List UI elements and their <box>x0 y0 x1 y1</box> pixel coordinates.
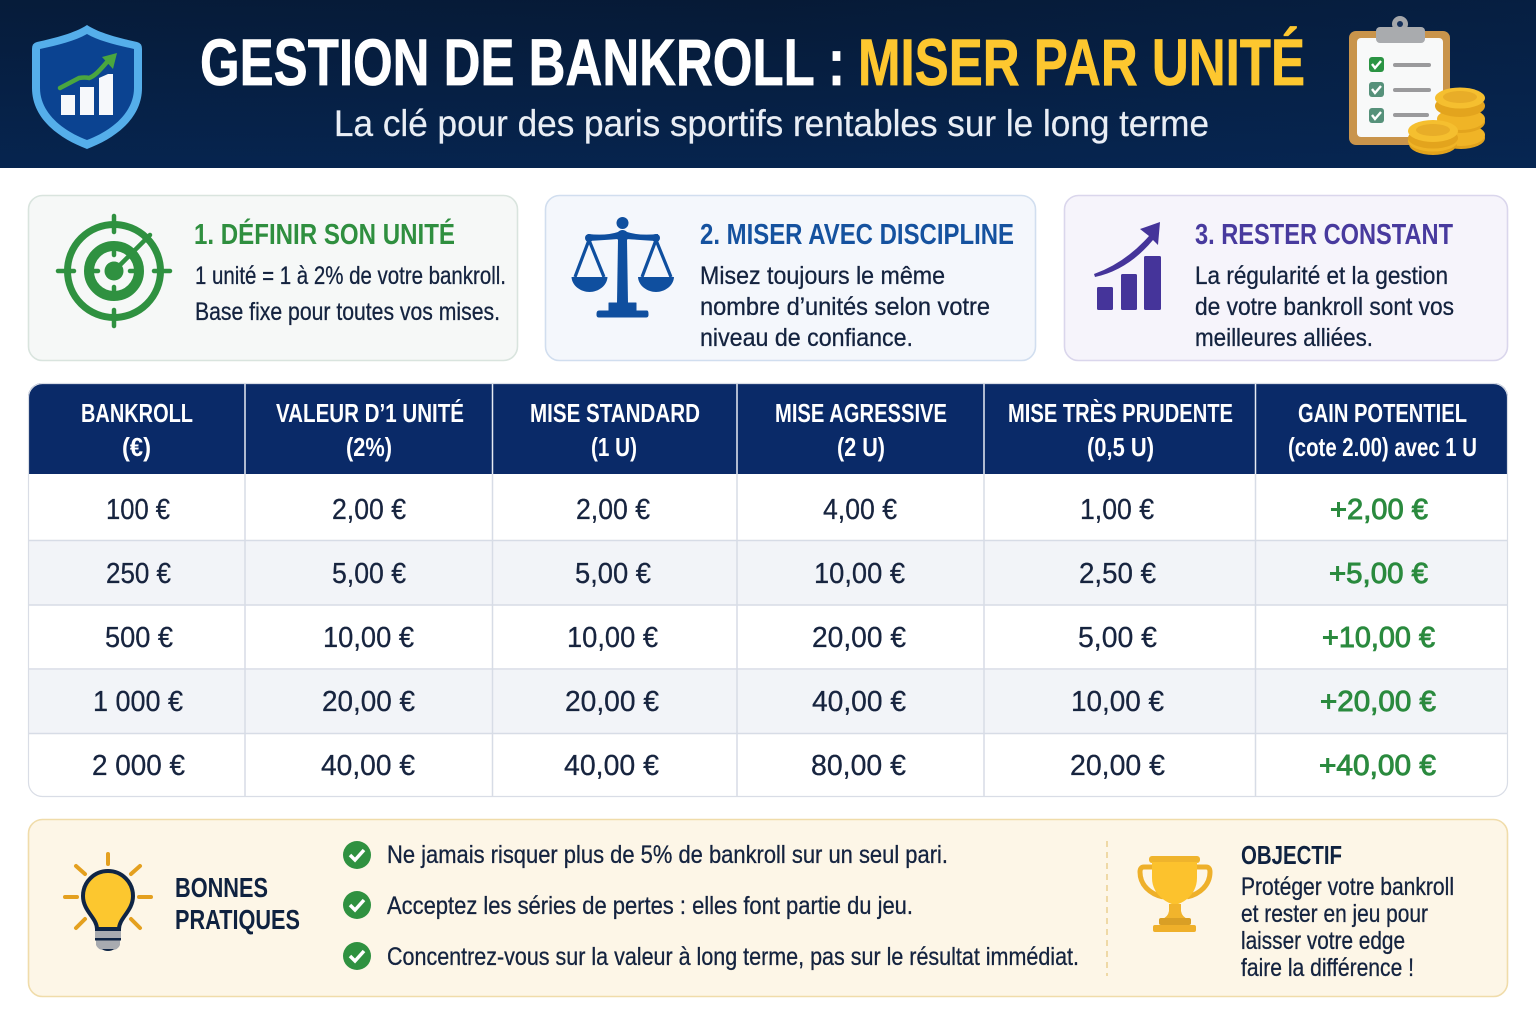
table row: 1 000 €: 20,00 € <box>565 686 659 718</box>
icon: rising chart <box>1094 222 1161 310</box>
table header row: (2 U) <box>837 432 885 462</box>
table row: 2 000 €: 80,00 € <box>811 750 906 782</box>
icon: shield with growth chart <box>32 25 142 149</box>
objective text <box>1241 840 1454 982</box>
text block: niveau de confiance. <box>700 324 913 352</box>
objective text: et rester en jeu pour <box>1241 900 1428 928</box>
heading: 3. RESTER CONSTANT <box>1195 219 1453 251</box>
table header row: (1 U) <box>591 432 637 462</box>
table row: 2 000 €: +40,00 € <box>1319 750 1436 782</box>
table row: 1 000 €: +20,00 € <box>1320 686 1436 718</box>
table row: 250 € <box>106 558 1428 590</box>
table row: 2 000 €: 2 000 € <box>92 750 185 782</box>
panel: définir son unité <box>28 196 518 360</box>
table row: 1 000 €: 10,00 € <box>1071 686 1164 718</box>
heading: BONNES <box>175 872 268 903</box>
objective text: faire la différence ! <box>1241 954 1414 982</box>
table header row: (cote 2.00) avec 1 U <box>1288 432 1477 462</box>
panel: miser avec discipline <box>546 196 1036 360</box>
text block: nombre d’unités selon votre <box>700 293 990 321</box>
table row: 250 €: 5,00 € <box>332 558 406 590</box>
table header row: (0,5 U) <box>1087 432 1154 462</box>
table header row: MISE AGRESSIVE <box>775 398 947 428</box>
table row: 500 €: 20,00 € <box>812 622 906 654</box>
table row: 250 €: +5,00 € <box>1329 558 1428 590</box>
title: GESTION DE BANKROLL : <box>200 25 845 99</box>
table row: 250 €: 5,00 € <box>575 558 651 590</box>
table header row: BANKROLL <box>81 398 193 428</box>
table row: 100 €: 2,00 € <box>332 494 406 526</box>
header banner <box>0 0 1536 168</box>
text block <box>1195 262 1454 352</box>
table row: 2 000 € <box>92 750 1436 782</box>
table row: 500 € <box>105 622 1435 654</box>
text block <box>195 262 506 326</box>
table row: 1 000 € <box>93 686 1436 718</box>
table header row: MISE TRÈS PRUDENTE <box>1008 398 1233 428</box>
heading <box>175 872 300 935</box>
icon: target <box>58 216 170 326</box>
table row: 500 €: 10,00 € <box>567 622 658 654</box>
panel: rester constant <box>1064 196 1508 360</box>
table row: 100 €: 1,00 € <box>1080 494 1154 526</box>
text block: Base fixe pour toutes vos mises. <box>195 298 500 326</box>
heading: 2. MISER AVEC DISCIPLINE <box>700 219 1014 251</box>
text block: 1 unité = 1 à 2% de votre bankroll. <box>195 262 506 290</box>
table row: 100 € <box>106 494 1428 526</box>
table row: 500 €: 500 € <box>105 622 173 654</box>
practice 3: Concentrez-vous sur la valeur à long terme, pas sur le résultat immédiat. <box>387 943 1079 971</box>
table row: 500 €: 10,00 € <box>323 622 414 654</box>
table header row: (2%) <box>346 432 392 462</box>
objective text: OBJECTIF <box>1241 840 1342 870</box>
table row: 100 €: 100 € <box>106 494 170 526</box>
heading: 1. DÉFINIR SON UNITÉ <box>194 217 455 251</box>
table header row: (€) <box>122 432 151 462</box>
practice 2: Acceptez les séries de pertes : elles font partie du jeu. <box>387 892 913 920</box>
table row: 2 000 €: 20,00 € <box>1070 750 1165 782</box>
table row: 250 €: 250 € <box>106 558 171 590</box>
table header row: GAIN POTENTIEL <box>1298 398 1467 428</box>
table header row: MISE STANDARD <box>530 398 700 428</box>
text block: La régularité et la gestion <box>1195 262 1448 290</box>
table header row: VALEUR D’1 UNITÉ <box>276 398 464 428</box>
text block <box>700 262 990 352</box>
table row: 250 €: 10,00 € <box>814 558 905 590</box>
table row: 250 €: 2,50 € <box>1079 558 1156 590</box>
practice 1: Ne jamais risquer plus de 5% de bankroll sur un seul pari. <box>387 841 948 869</box>
table row: 500 €: 5,00 € <box>1078 622 1157 654</box>
table row: 100 €: 4,00 € <box>823 494 897 526</box>
icon: scales <box>572 217 674 317</box>
table header row <box>81 398 1477 462</box>
objective text: laisser votre edge <box>1241 927 1405 955</box>
text block: meilleures alliées. <box>1195 324 1373 352</box>
objective text: Protéger votre bankroll <box>1241 873 1454 901</box>
table row: 2 000 €: 40,00 € <box>564 750 659 782</box>
text block: de votre bankroll sont vos <box>1195 293 1454 321</box>
heading: PRATIQUES <box>175 904 300 935</box>
table row: 2 000 €: 40,00 € <box>321 750 415 782</box>
text block: Misez toujours le même <box>700 262 945 290</box>
table row: 100 €: 2,00 € <box>576 494 650 526</box>
table row: 1 000 €: 1 000 € <box>93 686 183 718</box>
title: MISER PAR UNITÉ <box>858 25 1305 99</box>
table row: 1 000 €: 20,00 € <box>322 686 415 718</box>
table row: 500 €: +10,00 € <box>1322 622 1435 654</box>
icon: light bulb <box>65 854 151 951</box>
table: bankroll stakes <box>28 383 1508 797</box>
table row: 100 €: +2,00 € <box>1330 494 1428 526</box>
subtitle: La clé pour des paris sportifs rentables sur le long terme <box>334 103 1209 144</box>
icon: clipboard and coins <box>1349 16 1485 155</box>
table row: 1 000 €: 40,00 € <box>812 686 906 718</box>
icon: trophy <box>1140 856 1210 932</box>
panel: bonnes pratiques <box>28 820 1508 996</box>
